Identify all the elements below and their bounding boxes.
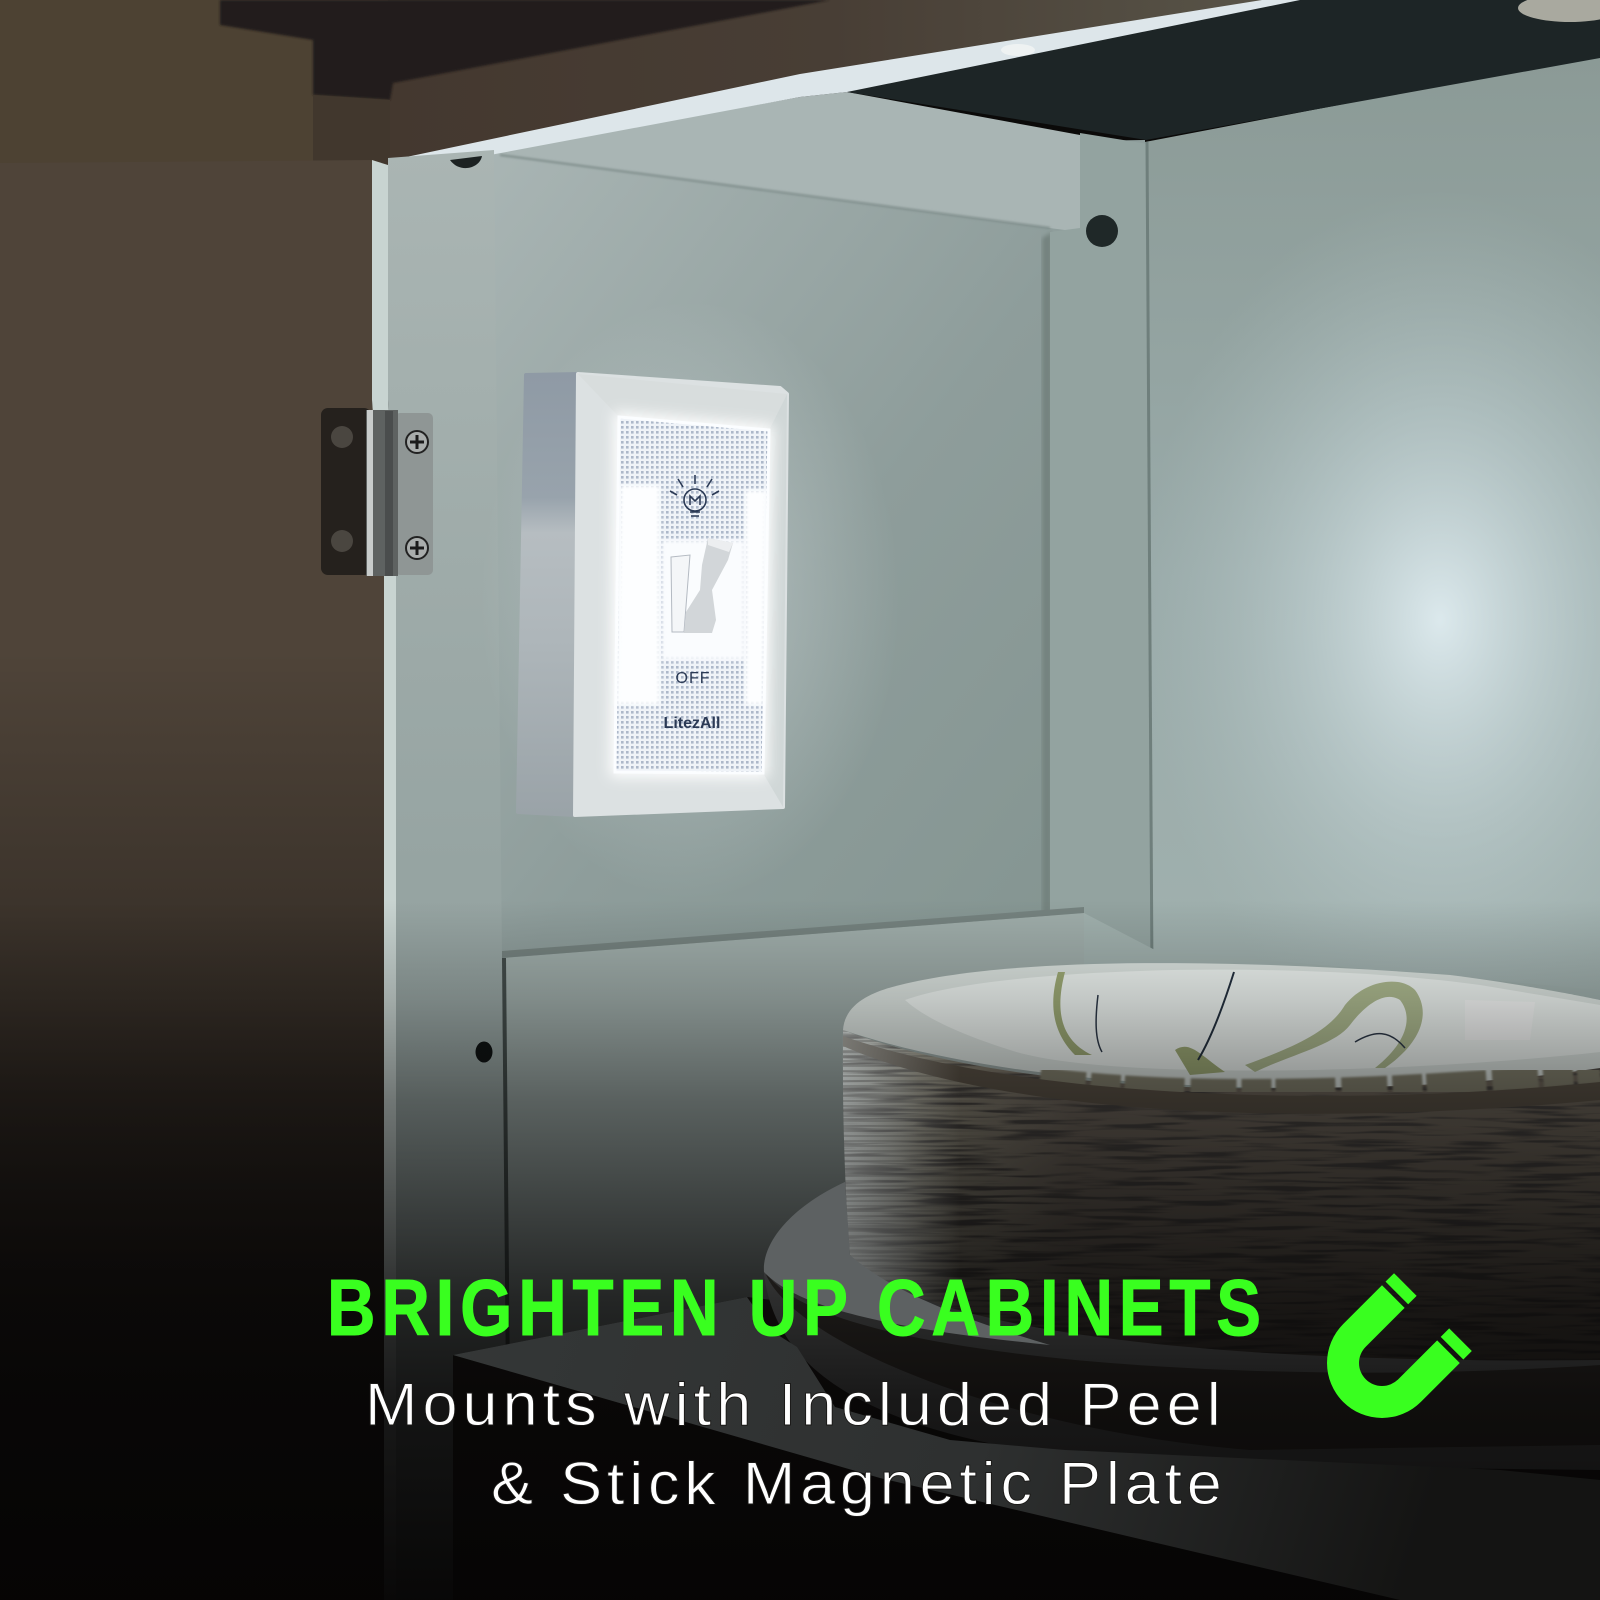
hinge knuckle (366, 410, 398, 576)
toggle lever highlight (708, 538, 733, 552)
icon: magnet (1304, 1273, 1472, 1441)
hinge highlight (367, 410, 373, 576)
door white edge (372, 160, 396, 1600)
background wall behind door (0, 0, 400, 170)
ledge line (500, 155, 1050, 228)
panel ledge band (502, 907, 1084, 958)
lower plate side (765, 1272, 1600, 1450)
panel left edge (504, 958, 510, 1600)
hinge pin (385, 411, 393, 576)
subheading text (365, 1371, 1222, 1518)
lit lower plate surface (764, 1182, 1050, 1345)
screw bottom right (406, 537, 428, 559)
heading: BRIGHTEN UP CABINETS (327, 1262, 1261, 1352)
magnet body (1304, 1285, 1460, 1441)
small shelf pin (1001, 44, 1035, 56)
magnet pole bottom (1441, 1328, 1472, 1359)
upper back wall recess (494, 92, 1080, 232)
plate rim (843, 963, 1600, 1088)
cabinet side panel (313, 95, 390, 165)
frame hole lower (476, 1042, 492, 1062)
frame hole top (450, 156, 482, 168)
bright led zone right (745, 490, 767, 705)
lower back panel (502, 913, 1084, 1600)
left frame panel (388, 150, 510, 1600)
bottom shelf base (453, 1297, 1600, 1600)
lower plate rim (764, 1182, 1600, 1470)
switch side face (518, 374, 580, 815)
right frame column (1050, 133, 1152, 1000)
switch label OFF: OFF (676, 670, 710, 687)
back wall (494, 140, 1150, 1000)
led panel dotted lens (615, 417, 769, 773)
lit left side of plate stack (843, 1030, 948, 1305)
stack side (843, 1030, 1600, 1360)
magnet pole top (1386, 1273, 1417, 1304)
bulb icon (670, 475, 719, 516)
bright shelf light strip (392, 0, 1300, 160)
light halo around switch (480, 300, 900, 900)
shelf front band (388, 0, 1275, 162)
wall below right column (1084, 913, 1600, 1300)
door panel (0, 160, 384, 1600)
rim shadow (843, 1036, 1600, 1114)
light glow on right wall (1140, 190, 1600, 1050)
stack line texture (843, 1030, 956, 1277)
column hole (1086, 215, 1118, 247)
switch front plate (575, 374, 787, 815)
subheading line 1: Mounts with Included Peel (365, 1371, 1221, 1439)
plate right bevel (763, 394, 787, 807)
lower plate stack (764, 1182, 1600, 1470)
door dark fade (0, 650, 384, 1600)
corner fixture (1518, 0, 1600, 22)
plate decoration: dark line (1198, 972, 1234, 1060)
screw bottom left (331, 530, 353, 552)
hinge right leaf (395, 413, 433, 575)
bright led zone around toggle (662, 540, 745, 660)
dark shelf underside (847, 0, 1600, 140)
plate top bevel (578, 374, 787, 430)
dark top trim (220, 0, 830, 100)
bottom dark fade overlay (0, 900, 1600, 1600)
bright reflection (1465, 1000, 1535, 1040)
plate decoration: green leaf (1175, 1047, 1225, 1075)
door hinge (321, 408, 433, 576)
plate decoration: green stem (1053, 972, 1092, 1055)
toggle base (671, 555, 690, 632)
brand label: LitezAll (664, 715, 720, 732)
lit shelf surface (453, 1297, 1600, 1600)
led panel glow (615, 417, 769, 773)
plate decoration: green loop (1245, 982, 1423, 1072)
plate bowl (905, 970, 1600, 1071)
recess strip shadow (1042, 232, 1052, 915)
toggle lever (684, 538, 733, 633)
screw top left (331, 426, 353, 448)
bright led zone left (616, 485, 660, 705)
hinge left leaf (321, 408, 371, 575)
rim front segments (1040, 1072, 1600, 1090)
upper plate stack (843, 963, 1600, 1370)
LED switch light (518, 374, 787, 815)
subheading line 2: & Stick Magnetic Plate (491, 1450, 1222, 1518)
plate decoration: thin lines (1096, 995, 1405, 1052)
stack texture (843, 1032, 1600, 1328)
screw top right (406, 431, 428, 453)
right side wall (1145, 55, 1600, 1100)
column corner shadow (1147, 142, 1152, 975)
